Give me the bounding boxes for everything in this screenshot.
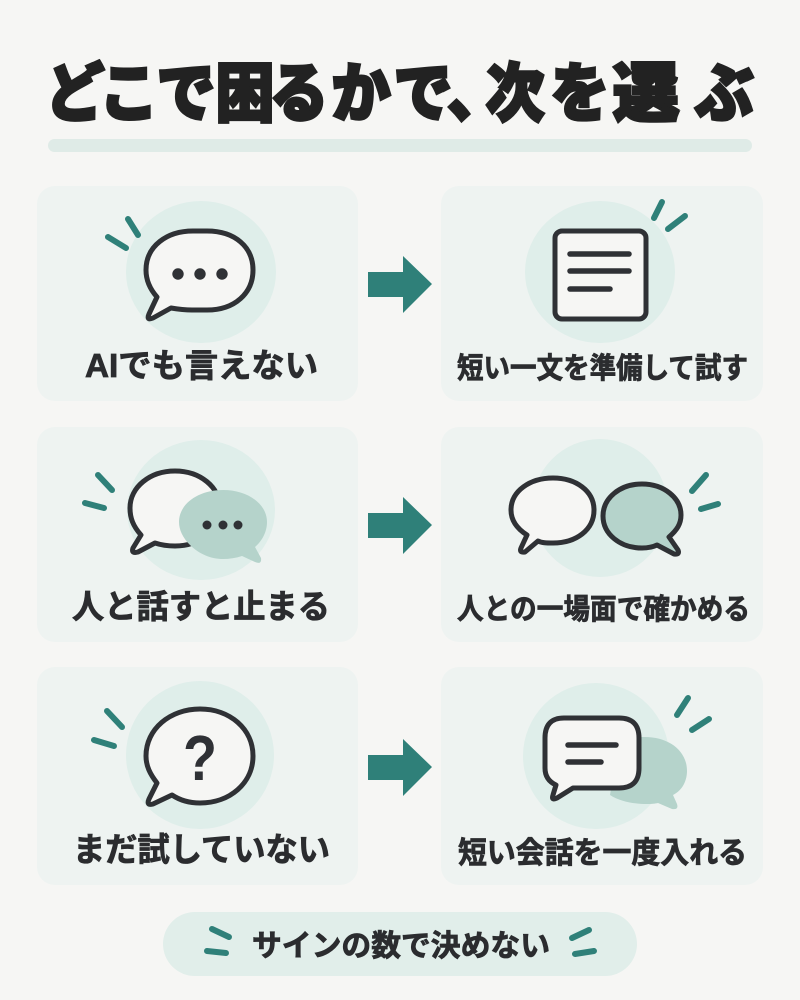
label: 短い会話を一度入れる: 短い会話を一度入れる [458, 837, 747, 870]
icon: left sparks [207, 929, 229, 953]
label: 短い一文を準備して試す: 短い一文を準備して試す [457, 352, 748, 385]
icon: accent sparks [85, 475, 112, 508]
icon: two speech bubbles [511, 478, 681, 554]
icon: overlapping speech bubbles [130, 471, 267, 563]
panel: 人との一場面で確かめる [441, 427, 763, 642]
label: 人と話すと止まる: 人と話すと止まる [72, 588, 330, 625]
label: まだ試していない: まだ試していない [73, 831, 330, 868]
title: 選 [613, 58, 679, 130]
arrow 1 [368, 256, 432, 313]
label: AIでも言えない: AIでも言えない [85, 347, 318, 384]
icon: document with lines [555, 231, 646, 319]
icon: rounded chat bubble over green bubble [545, 718, 687, 809]
icon: speech bubble with question mark [146, 709, 253, 804]
icon: accent sparks [692, 475, 718, 509]
title: どこで困るかで、次を [46, 59, 609, 131]
arrow 2 [368, 497, 432, 554]
footer text: サインの数で決めない [252, 930, 550, 963]
label: 人との一場面で確かめる: 人との一場面で確かめる [457, 593, 750, 626]
arrow 3 [368, 739, 432, 796]
panel: 人と話すと止まる [37, 427, 358, 642]
icon: right sparks [572, 930, 594, 954]
icon: accent sparks [677, 698, 709, 730]
footer pill [163, 912, 637, 976]
icon: accent sparks [654, 202, 685, 229]
title: ぶ [695, 59, 753, 131]
icon: speech bubble with question mark: ? [183, 722, 217, 794]
panel: 短い一文を準備して試す [441, 186, 763, 401]
icon: speech bubble with dots [146, 231, 253, 319]
panel: 短い会話を一度入れる [441, 667, 763, 885]
icon: accent sparks [108, 219, 138, 248]
panel: まだ試していない [37, 667, 358, 885]
icon: accent sparks [94, 711, 122, 746]
panel: AIでも言えない [37, 186, 358, 401]
